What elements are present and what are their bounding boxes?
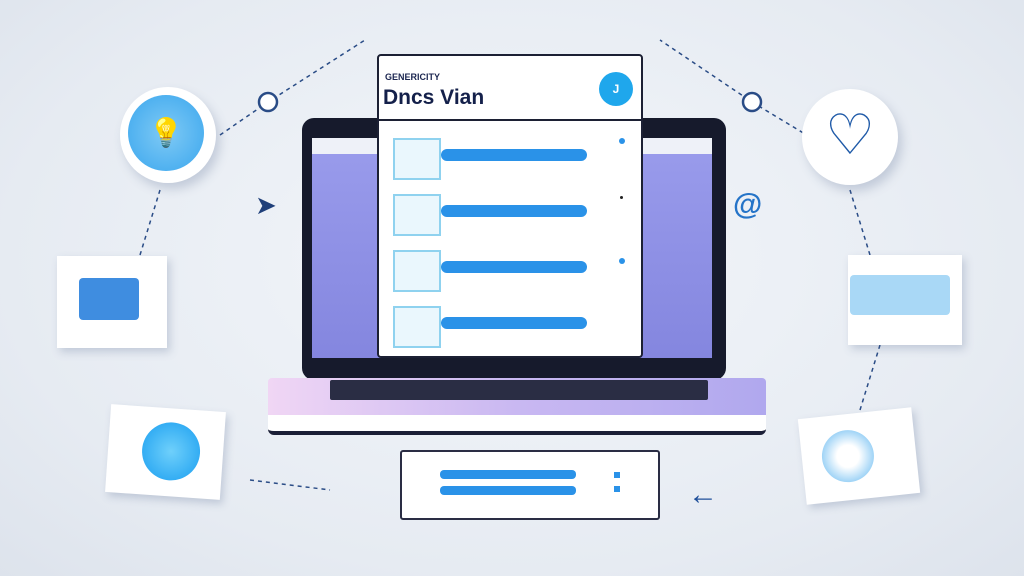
card: right bottom (798, 407, 920, 505)
card: left mid (57, 256, 167, 348)
icon: bulb circle (120, 87, 216, 183)
icon: avatar (599, 72, 633, 106)
list rows (393, 138, 625, 348)
bottom box (400, 450, 660, 520)
icon: bulb circle: 💡 (149, 117, 183, 148)
laptop (268, 118, 766, 435)
icon: at sign: @ (733, 188, 762, 221)
keyboard base (268, 378, 766, 420)
card: right mid (848, 255, 962, 345)
icon: heart circle (802, 89, 898, 185)
icon: cursor: ➤ (255, 190, 277, 220)
card: main list (377, 54, 643, 358)
arrow: bottom right: ← (688, 478, 718, 511)
card: main list: Dncs Vian (383, 86, 484, 109)
screen bezel (302, 118, 726, 380)
icon: heart circle: ♡ (825, 103, 875, 166)
heading: GENERICITY (385, 72, 440, 82)
card: left bottom (105, 404, 226, 500)
icon: avatar: J (613, 82, 619, 96)
screen (312, 138, 712, 358)
